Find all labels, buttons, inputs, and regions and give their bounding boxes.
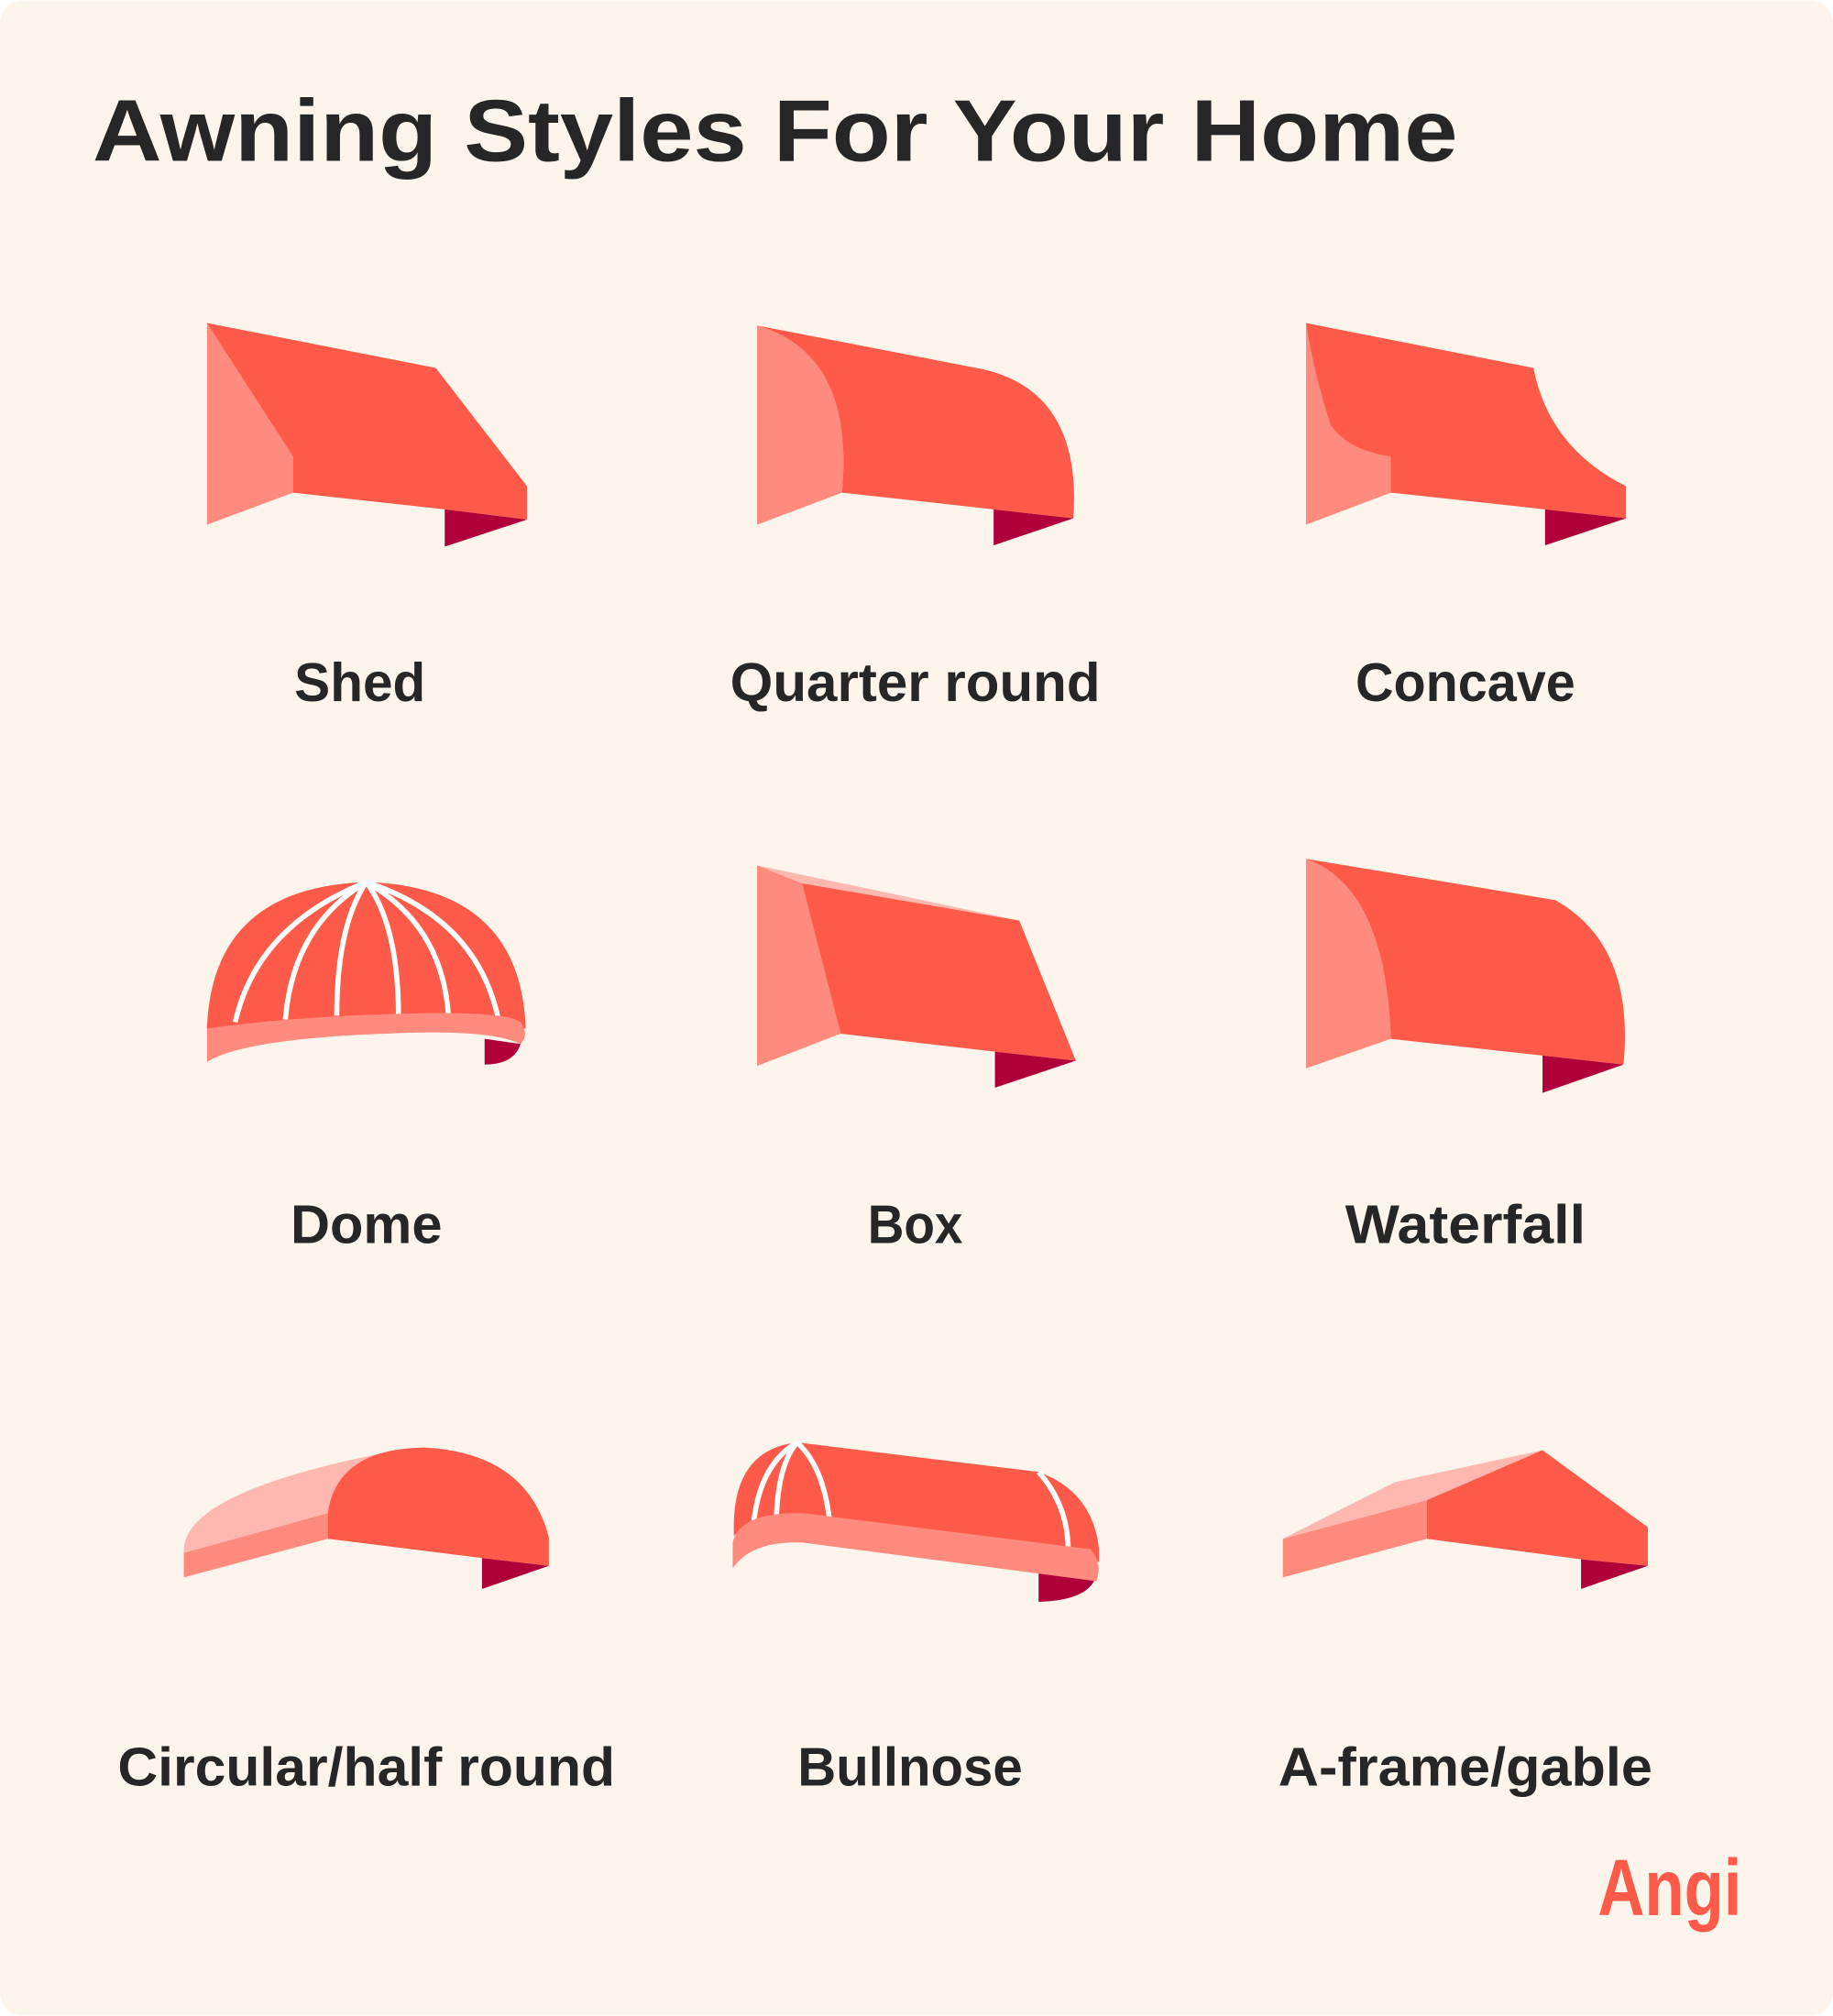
label: concave: Concave [1356,653,1575,713]
label: bullnose: Bullnose [797,1738,1023,1798]
awning: shed [207,323,527,546]
awning: bullnose [732,1442,1099,1602]
label: shed: Shed [294,653,425,713]
awning: dome [207,882,526,1065]
label: quarter round: Quarter round [730,653,1101,713]
label: dome: Dome [291,1196,442,1255]
awning: concave [1306,323,1626,545]
label: waterfall: Waterfall [1345,1196,1586,1255]
awning: circular/half round [183,1448,549,1589]
label: a-frame/gable: A-frame/gable [1279,1738,1652,1798]
awning: quarter round [757,325,1074,545]
awning: waterfall [1306,859,1625,1093]
awning: a-frame/gable [1283,1450,1648,1589]
title: Awning Styles For Your Home [93,83,1457,181]
label: box: Box [868,1196,963,1255]
label: circular/half round: Circular/half round [117,1738,615,1798]
logo: Angi: Angi [1597,1844,1741,1933]
awning: box [757,865,1076,1088]
